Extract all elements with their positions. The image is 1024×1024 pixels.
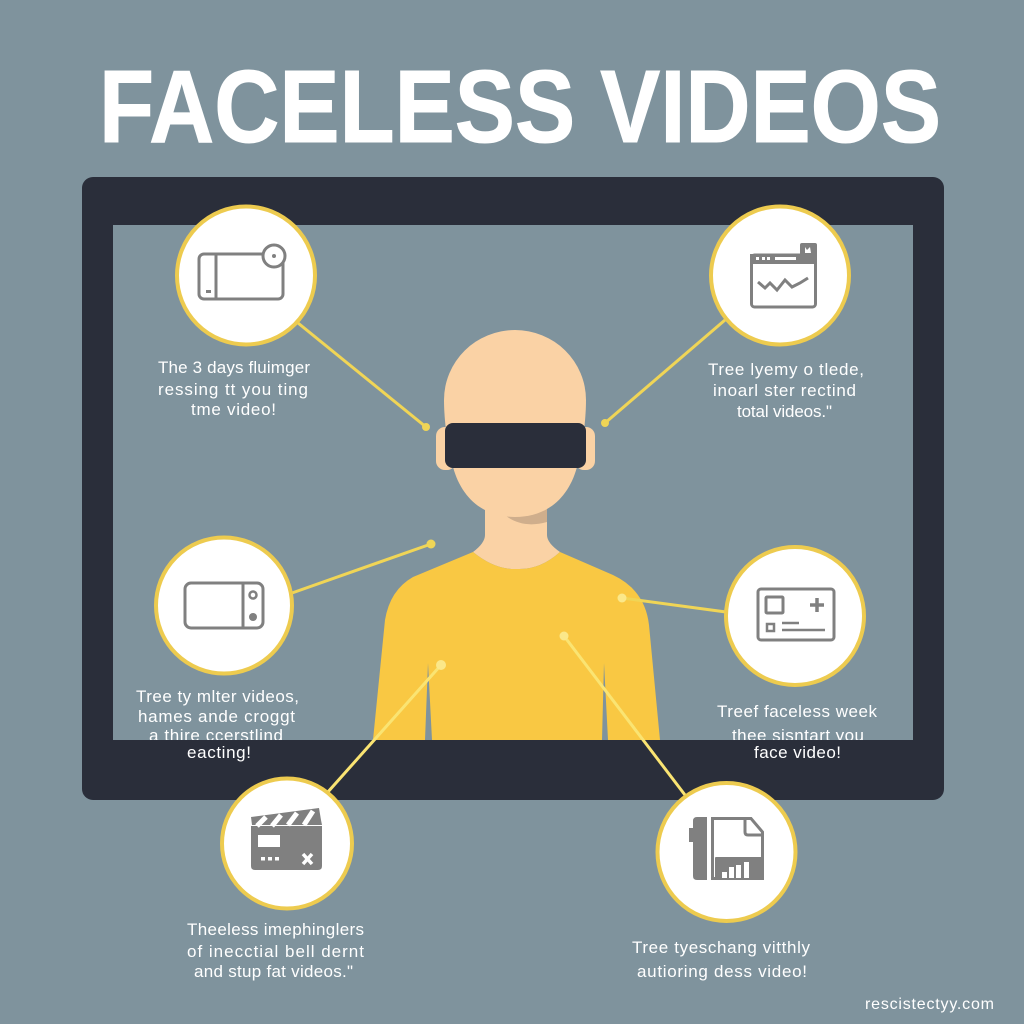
text block: top left xyxy=(158,358,310,419)
text block: bottom left xyxy=(187,920,364,981)
monitor frame xyxy=(82,177,944,800)
text block: middle right xyxy=(717,705,877,758)
text block: middle right: face video! xyxy=(754,743,841,762)
text block: bottom right: autioring dess video! xyxy=(637,962,807,981)
text block: bottom right: Tree tyeschang vitthly xyxy=(632,938,810,957)
icon circle: top left xyxy=(177,206,315,344)
text block: bottom left: of inecctial bell dernt xyxy=(187,942,364,961)
icon circle: bottom left xyxy=(222,778,352,908)
text block: top right: inoarl ster rectind xyxy=(713,381,856,400)
text block: middle left xyxy=(136,687,299,762)
text block: top right: Tree lyemy o tlede, xyxy=(708,360,864,379)
watermark: rescistectyy.com xyxy=(865,996,994,1013)
text block: middle left: eacting! xyxy=(187,743,251,762)
text block: top right xyxy=(708,360,864,421)
text block: middle left: Tree ty mlter videos, xyxy=(136,687,299,706)
icon circle: top right xyxy=(711,206,849,344)
text block: top left: ressing tt you ting xyxy=(158,380,308,399)
text block: top right: total videos." xyxy=(737,402,832,421)
text block: bottom right xyxy=(632,938,810,981)
text block: middle right: Treef faceless week xyxy=(717,702,878,721)
text block: middle left: a thire ccerstlind xyxy=(149,726,283,745)
text block: top left: tme video! xyxy=(191,400,276,419)
person figure xyxy=(373,330,660,740)
icon circle: middle right xyxy=(726,547,864,685)
icon circle: middle left xyxy=(156,538,292,674)
icon circle: bottom right xyxy=(658,783,796,921)
text block: middle left: hames ande croggt xyxy=(138,707,295,726)
text block: bottom left: Theeless imephinglers xyxy=(187,920,364,939)
text block: middle right: thee sisntart you xyxy=(732,726,864,745)
text block: top left: The 3 days fluimger xyxy=(158,358,310,377)
connector lines xyxy=(292,320,726,795)
text block: bottom left: and stup fat videos." xyxy=(194,962,353,981)
